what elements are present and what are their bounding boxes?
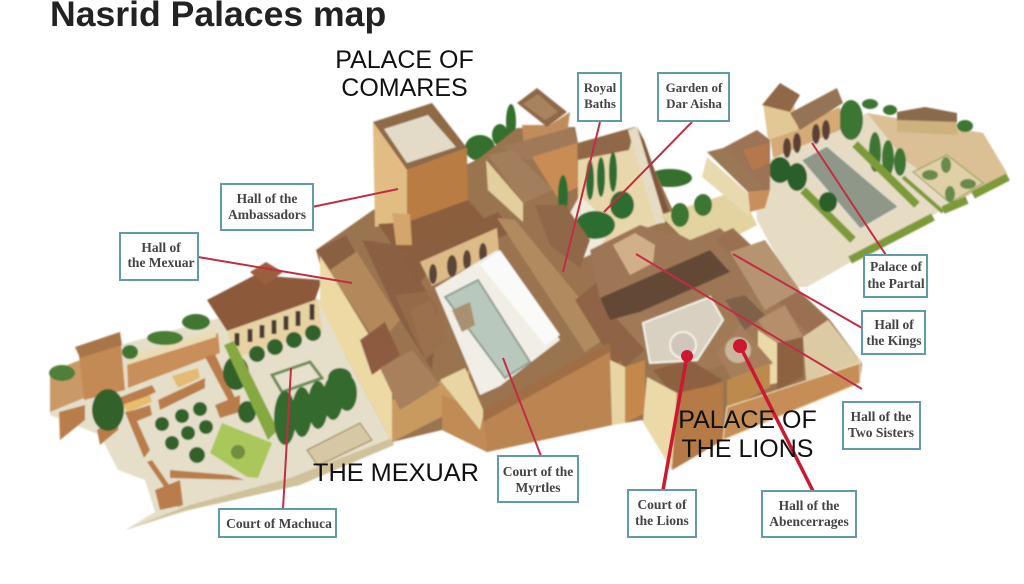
Palace of the Lions	[590, 225, 862, 470]
main complex base	[316, 127, 862, 470]
label text: the Mexuar	[127, 255, 195, 270]
label text: Baths	[584, 96, 616, 111]
Mexuar main building	[316, 235, 470, 442]
label text: the Lions	[635, 513, 689, 528]
trees and bushes	[92, 325, 321, 463]
heading: Palace of Comares: PALACE OF	[335, 46, 474, 74]
Partal area	[660, 83, 1008, 287]
Mexuar gallery	[227, 298, 322, 358]
heading: Palace of Comares	[335, 46, 474, 102]
Partal palace	[770, 107, 840, 158]
Comares portico	[402, 212, 512, 285]
label text: the Kings	[866, 333, 922, 348]
heading: The Mexuar: THE MEXUAR	[313, 459, 479, 487]
label text: Dar Aisha	[666, 96, 722, 111]
heading: Palace of the Lions: THE LIONS	[682, 435, 813, 463]
Comares tower	[373, 103, 490, 256]
Machuca hedge	[272, 362, 322, 392]
label text: Hall of the	[851, 409, 911, 424]
label text: Hall of the	[237, 191, 297, 206]
label text: the Partal	[867, 276, 925, 291]
label text: Ambassadors	[228, 207, 306, 222]
label text: Hall of	[141, 240, 181, 255]
label boxes	[120, 73, 927, 537]
label text: Myrtles	[516, 480, 560, 495]
illustration: Nasrid palace complex	[49, 83, 1008, 530]
label text: Court of Machuca	[226, 516, 332, 531]
Partal pool	[800, 145, 900, 230]
heading: Palace of the Lions: PALACE OF	[678, 406, 817, 434]
low garden walls	[59, 354, 245, 510]
label text: Hall of	[874, 317, 914, 332]
label text: Court of the	[503, 464, 573, 479]
callout leaders	[198, 122, 886, 509]
label text: Palace of	[870, 259, 923, 274]
hedges	[803, 144, 1008, 260]
label text: Royal	[584, 80, 617, 95]
Mexuar gardens	[49, 262, 394, 530]
label text: Two Sisters	[848, 425, 914, 440]
heading: Palace of the Lions	[678, 406, 817, 463]
heading: Palace of Comares: COMARES	[341, 74, 468, 102]
Court of the Myrtles	[435, 250, 560, 395]
label text	[127, 80, 925, 531]
trees behind Comares	[353, 104, 692, 244]
Myrtles east roof	[497, 218, 610, 352]
Myrtles front wall	[440, 330, 653, 452]
label text: Court of	[637, 497, 687, 512]
label text: Abencerrages	[769, 514, 849, 529]
label text: Hall of the	[779, 498, 839, 513]
red leaders with dots	[663, 339, 813, 491]
label text: Garden of	[666, 80, 723, 95]
upper buildings	[486, 88, 672, 262]
